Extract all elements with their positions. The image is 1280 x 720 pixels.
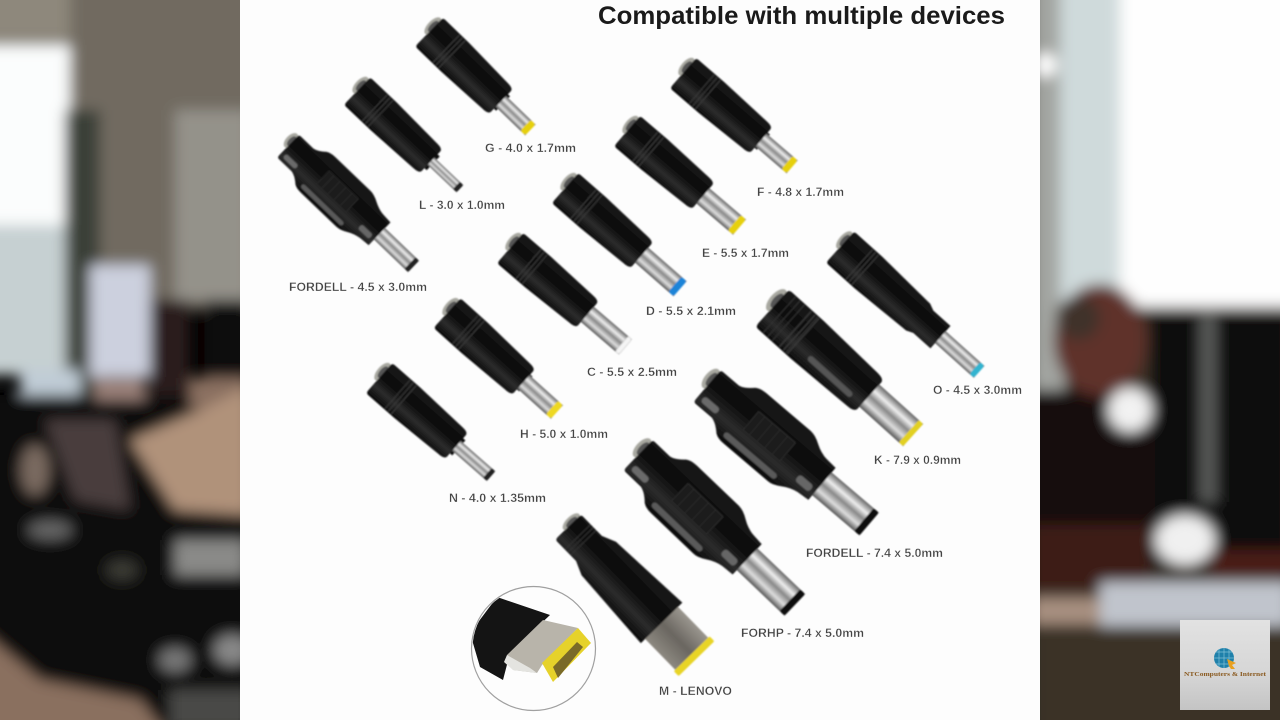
label D: D - 5.5 x 2.1mm (646, 304, 736, 318)
blurred background: left office photo (0, 0, 260, 720)
connector C (492, 228, 638, 362)
label O: O - 4.5 x 3.0mm (933, 383, 1022, 397)
panel: white product sheet (240, 0, 1040, 720)
connector N (361, 359, 504, 491)
logo text: NTComputers & Internet (1184, 671, 1267, 678)
connector FORDELL 7.4 x 5.0mm (680, 356, 891, 549)
label C: C - 5.5 x 2.5mm (587, 365, 677, 379)
connector L (339, 73, 473, 203)
label F: F - 4.8 x 1.7mm (757, 185, 844, 199)
connector FORHP (609, 426, 818, 629)
blurred background: right office photo (1030, 0, 1280, 720)
label G: G - 4.0 x 1.7mm (485, 141, 576, 155)
connector M Lenovo (543, 502, 717, 679)
label E: E - 5.5 x 1.7mm (702, 246, 789, 260)
connector K (749, 284, 930, 454)
label N: N - 4.0 x 1.35mm (449, 491, 546, 505)
label L: L - 3.0 x 1.0mm (419, 198, 505, 212)
label M: M - LENOVO (659, 684, 732, 698)
connector FORDELL 4.5 x 3.0mm (266, 123, 431, 284)
connector H (429, 294, 570, 427)
connector F (665, 53, 805, 182)
connector G (410, 13, 544, 144)
title: Compatible with multiple devices (598, 2, 1005, 30)
connector D (547, 169, 693, 304)
logo badge (1180, 620, 1270, 710)
label FORHP: FORHP - 7.4 x 5.0mm (741, 626, 864, 640)
icon: globe with cursor (1214, 648, 1236, 669)
inset circle: Lenovo tip close-up (470, 586, 596, 710)
label FORDELL 4.5: FORDELL - 4.5 x 3.0mm (289, 280, 427, 294)
label FORDELL 7.4: FORDELL - 7.4 x 5.0mm (806, 546, 943, 560)
connector O (821, 227, 993, 388)
connector E (609, 112, 753, 242)
label H: H - 5.0 x 1.0mm (520, 427, 608, 441)
label K: K - 7.9 x 0.9mm (874, 453, 961, 467)
